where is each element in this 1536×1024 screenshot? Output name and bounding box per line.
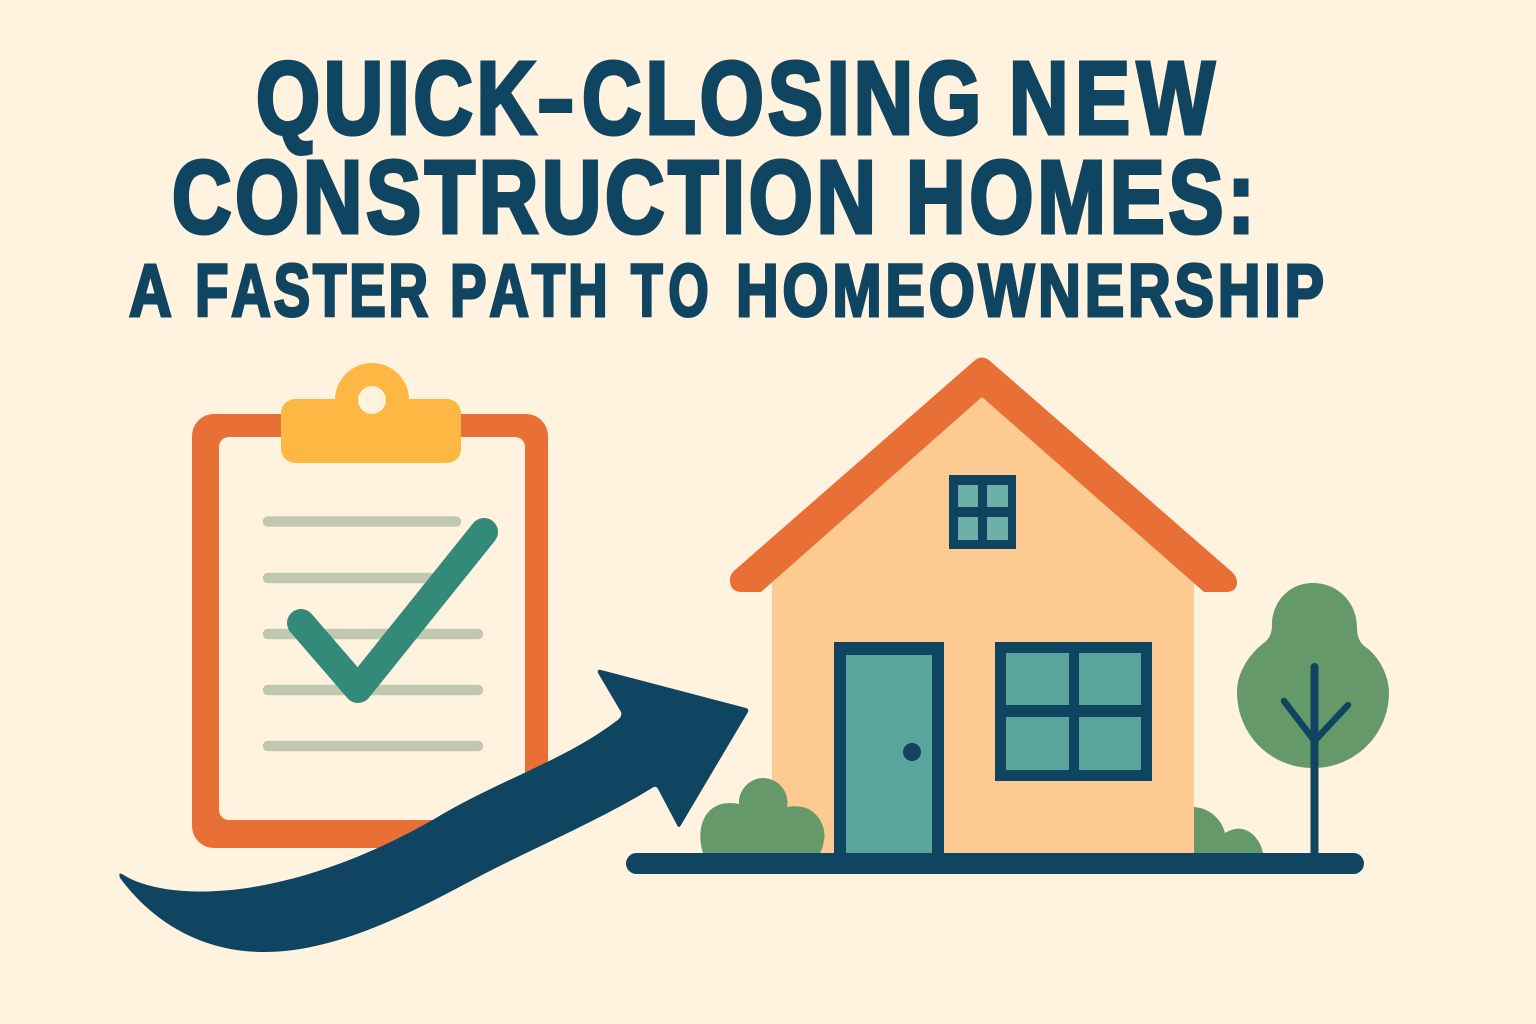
bush right <box>1194 807 1263 853</box>
title line 1: NEW <box>1009 41 1215 156</box>
subtitle: HOMEOWNERSHIP <box>736 250 1324 333</box>
title line 1: CLOSING <box>582 41 981 156</box>
title line 2: HOMES: <box>906 140 1255 255</box>
clipboard board <box>192 414 548 848</box>
title line 1: – <box>538 40 573 155</box>
ground line <box>626 853 1364 874</box>
clipboard paper <box>219 437 525 820</box>
subtitle <box>129 249 1324 333</box>
subtitle: FASTER <box>195 249 428 332</box>
bush left <box>700 778 824 853</box>
front window <box>995 642 1152 781</box>
check mark <box>301 532 484 689</box>
title line 2: CONSTRUCTION <box>172 140 876 255</box>
title line 2 <box>172 140 1255 255</box>
title line 1 <box>256 40 1215 156</box>
clipboard clip <box>281 363 461 463</box>
illustration: house scene <box>626 358 1389 874</box>
title line 1: QUICK <box>256 41 536 156</box>
icon: clipboard with checklist <box>192 363 548 848</box>
subtitle: A <box>129 250 172 333</box>
door <box>834 642 944 853</box>
house body <box>772 390 1194 853</box>
tree <box>1237 583 1389 853</box>
title <box>129 40 1324 333</box>
subtitle: TO <box>631 249 709 332</box>
checklist lines <box>268 522 478 746</box>
roof <box>730 358 1237 592</box>
subtitle: PATH <box>450 249 608 332</box>
attic window <box>949 475 1016 549</box>
arrow <box>119 670 748 952</box>
